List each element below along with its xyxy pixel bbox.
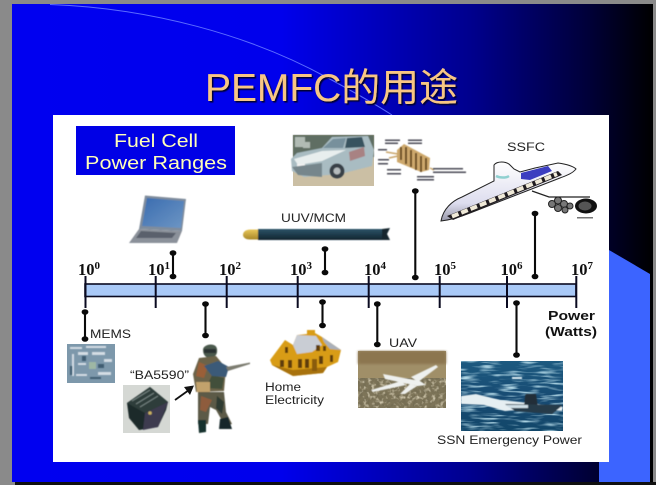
label: Home Electricity: [265, 382, 324, 407]
axis labels: powers of ten: 10: [148, 260, 164, 279]
axis labels: powers of ten: 10: [78, 260, 94, 279]
axis labels: powers of ten: [78, 260, 594, 279]
axis labels: powers of ten: 10: [434, 260, 450, 279]
axis labels: powers of ten: 10: [364, 260, 380, 279]
photo: BA5590 battery: [123, 385, 170, 433]
axis labels: powers of ten: 10: [219, 260, 236, 279]
light blue corner shape: [599, 250, 650, 482]
icon: UUV torpedo: [243, 228, 390, 240]
axis labels: powers of ten: 3: [306, 260, 312, 272]
axis title: Power (Watts): (Watts): [545, 324, 597, 339]
axis labels: powers of ten: 1: [164, 260, 170, 272]
axis labels: powers of ten: 4: [380, 260, 386, 272]
white content panel: [53, 115, 609, 462]
heading box: Fuel Cell Power Ranges: Fuel Cell: [114, 130, 198, 151]
heading box: Fuel Cell Power Ranges: [76, 126, 235, 175]
heading box: Fuel Cell Power Ranges: Power Ranges: [85, 152, 227, 173]
label: UAV: UAV: [389, 338, 417, 350]
photo: MEMS chip: [67, 344, 115, 383]
photo: submarine at sea: [461, 361, 563, 431]
icon: laptop: [129, 196, 186, 243]
title: PEMFC的用途: [205, 67, 458, 110]
diagram: fuel cell stack: [378, 140, 466, 180]
diagram: SSFC submarine cutaway: [441, 162, 597, 221]
axis labels: powers of ten: 10: [571, 260, 588, 279]
photo: UAV over desert: [358, 351, 446, 408]
axis labels: powers of ten: 6: [517, 260, 523, 272]
axis labels: powers of ten: 5: [450, 260, 456, 272]
axis labels: powers of ten: 7: [588, 260, 594, 272]
connector lines: [82, 188, 538, 358]
photo: fuel cell car: [291, 135, 374, 186]
axis labels: powers of ten: 2: [236, 260, 242, 272]
label: Home Electricity: Home: [265, 382, 301, 394]
arrow: battery to soldier: [175, 386, 194, 400]
label: Home Electricity: Electricity: [265, 395, 324, 407]
axis title: Power (Watts): [545, 308, 597, 339]
decorative arc line: [50, 4, 392, 115]
label: SSN Emergency Power: SSN Emergency Power: [437, 434, 582, 447]
axis labels: powers of ten: 0: [94, 260, 100, 272]
axis labels: powers of ten: 10: [500, 260, 517, 279]
power axis: [85, 276, 576, 308]
icon: house: [270, 330, 341, 376]
axis title: Power (Watts): Power: [548, 308, 595, 323]
label: SSFC: SSFC: [507, 142, 545, 154]
label: MEMS: MEMS: [90, 327, 131, 341]
icon: soldier: [193, 345, 250, 433]
label: UUV/MCM: UUV/MCM: [281, 213, 346, 225]
axis labels: powers of ten: 10: [290, 260, 306, 279]
label: BA5590: “BA5590”: [130, 370, 189, 382]
